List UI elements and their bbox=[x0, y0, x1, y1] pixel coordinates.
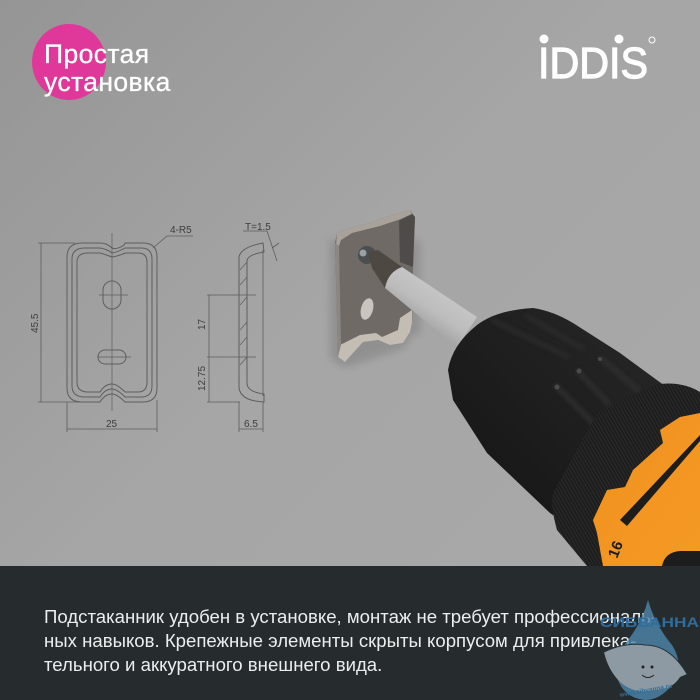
dimension labels: 4-R5 bbox=[170, 225, 192, 236]
dimension labels: 12.75 bbox=[197, 366, 208, 391]
dimension labels: 6.5 bbox=[244, 419, 258, 430]
left edge bbox=[335, 243, 341, 357]
orange drill body bbox=[593, 413, 700, 566]
dark clutch mark bbox=[662, 551, 700, 566]
slot hole in bracket bbox=[358, 297, 376, 321]
dimension lines bbox=[38, 231, 279, 432]
dimension labels bbox=[30, 222, 271, 430]
bracket plate bbox=[335, 210, 415, 362]
technical drawing of bracket bbox=[38, 231, 279, 432]
watermark: sibvanna bathtub logo: www.sibvanna.ru bbox=[618, 683, 673, 699]
lower rim bbox=[338, 310, 412, 362]
top rim bbox=[336, 210, 412, 246]
metal bracket on wall bbox=[330, 210, 420, 368]
iddis logo: IDDIS bbox=[538, 39, 648, 88]
bottom dark panel bbox=[0, 566, 700, 700]
dimension labels: 25 bbox=[106, 419, 118, 430]
watermark: sibvanna bathtub logo bbox=[600, 600, 699, 700]
title: Простая bbox=[44, 39, 150, 69]
drill collar ring bbox=[552, 384, 700, 566]
watermark: sibvanna bathtub logo: СИБВАННА bbox=[600, 614, 699, 630]
dimension labels: 17 bbox=[197, 318, 208, 330]
black slit on body bbox=[620, 435, 700, 526]
dimension labels: T=1.5 bbox=[245, 222, 271, 233]
drill chuck bbox=[448, 308, 665, 520]
title bbox=[44, 39, 171, 97]
description text: тельного и аккуратного внешнего вида. bbox=[44, 654, 382, 675]
description text: Подстаканник удобен в установке, монтаж не требует профессиональ- bbox=[44, 606, 657, 627]
dimension labels: 45.5 bbox=[30, 313, 41, 333]
speed number: 16 bbox=[605, 539, 627, 560]
title: установка bbox=[44, 67, 171, 97]
front view outline bbox=[67, 233, 157, 411]
description text: ных навыков. Крепежные элементы скрыты корпусом для привлека- bbox=[44, 630, 636, 651]
side view profile bbox=[239, 243, 264, 402]
right inner wall bbox=[399, 214, 415, 267]
drill bit and shaft bbox=[368, 250, 477, 347]
screw head bbox=[358, 246, 376, 264]
pink circle accent bbox=[32, 24, 106, 100]
description text bbox=[44, 606, 657, 675]
